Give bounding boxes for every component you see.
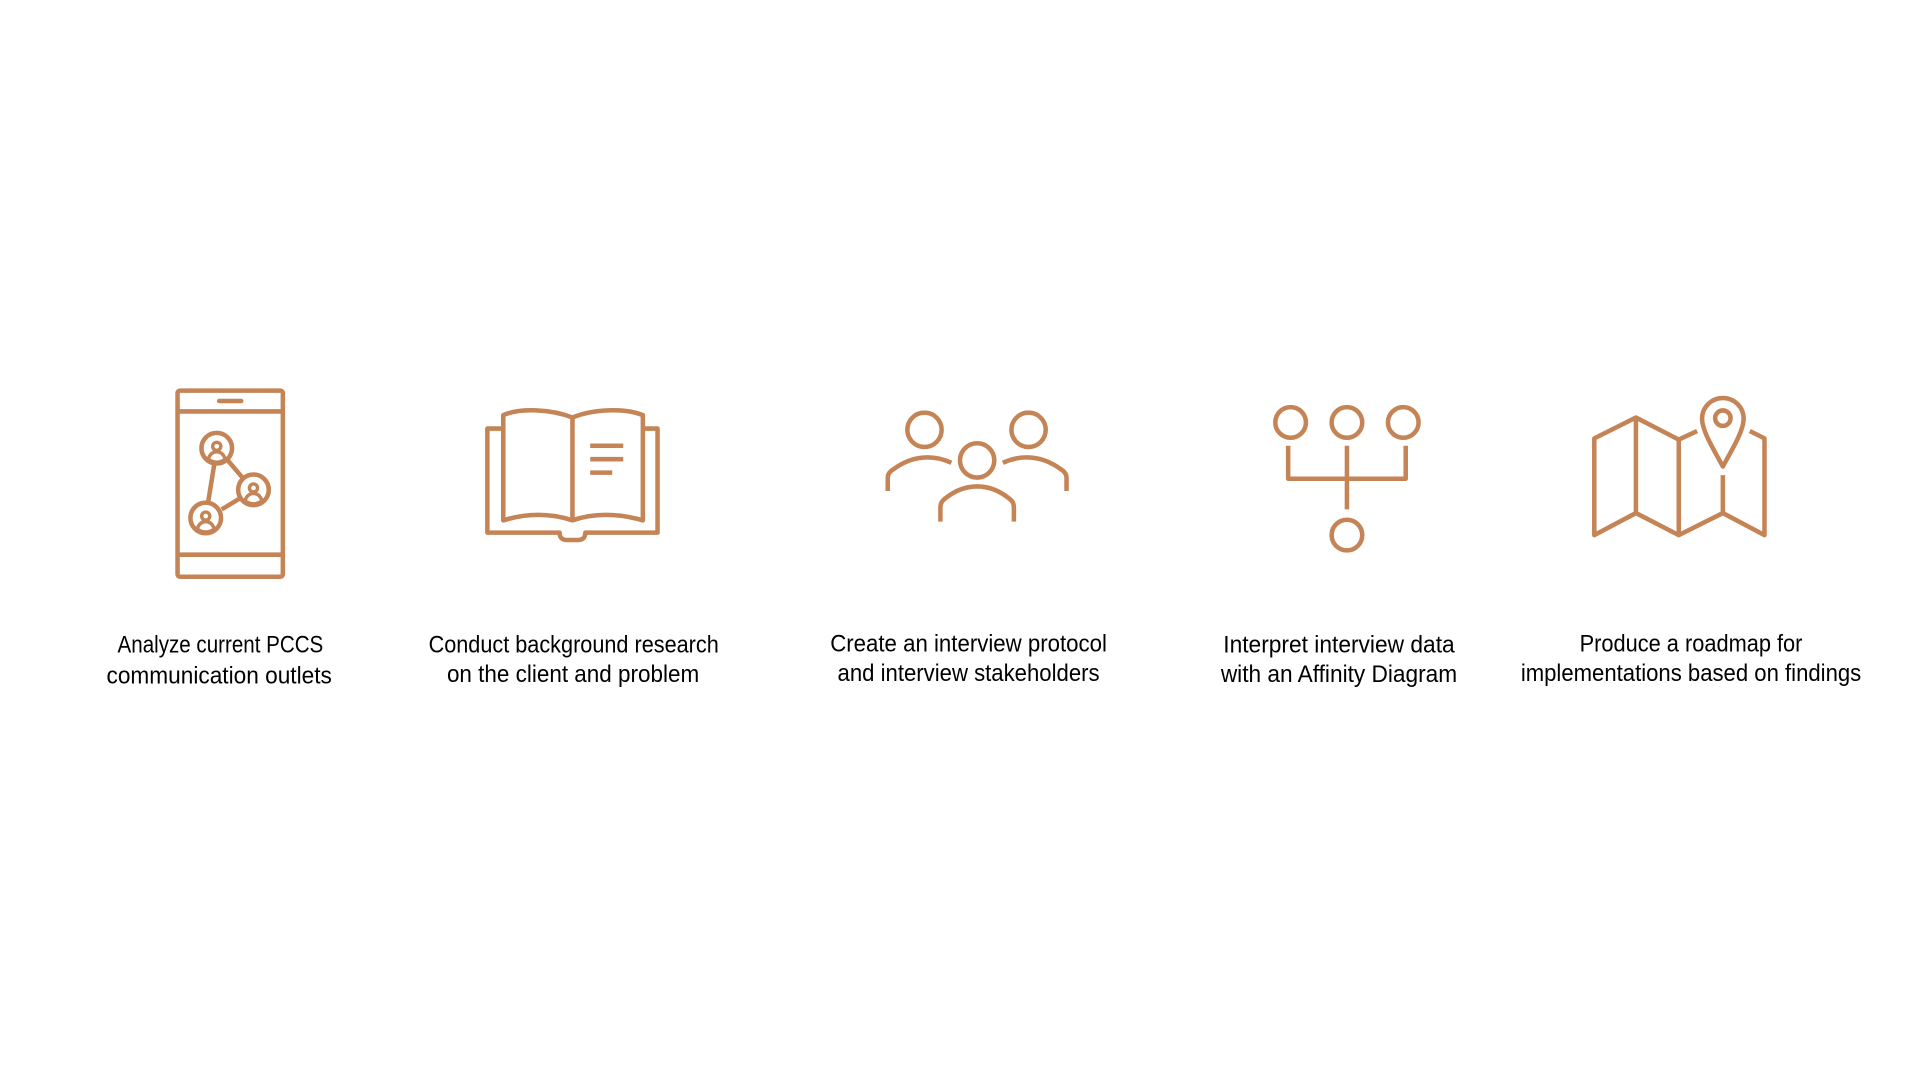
- caption: step 3: and interview stakeholders: [838, 660, 1100, 687]
- icon: map with pin: [1594, 398, 1764, 535]
- caption: step 5: Produce a roadmap for: [1580, 630, 1803, 657]
- caption: step 1: communication outlets: [107, 662, 332, 689]
- caption: step 4: Interpret interview data: [1223, 632, 1455, 659]
- step 4: affinity diagram: [1220, 407, 1461, 688]
- step 5: roadmap: [1521, 398, 1861, 687]
- icon: phone with social network: [178, 391, 283, 577]
- icon: three people: [888, 413, 1067, 522]
- caption: step 3: Create an interview protocol: [830, 630, 1107, 657]
- icon: affinity tree: [1275, 407, 1419, 550]
- caption: step 2: Conduct background research: [429, 632, 719, 659]
- caption: step 1: Analyze current PCCS: [118, 632, 323, 659]
- step 2: background research: [429, 410, 725, 688]
- caption: step 5: implementations based on findings: [1521, 660, 1861, 687]
- icon: open book: [487, 410, 658, 540]
- step 3: interviews: [830, 413, 1114, 687]
- step 1: analyze outlets: [107, 391, 332, 689]
- caption: step 2: on the client and problem: [447, 661, 699, 688]
- caption: step 4: with an Affinity Diagram: [1220, 661, 1457, 688]
